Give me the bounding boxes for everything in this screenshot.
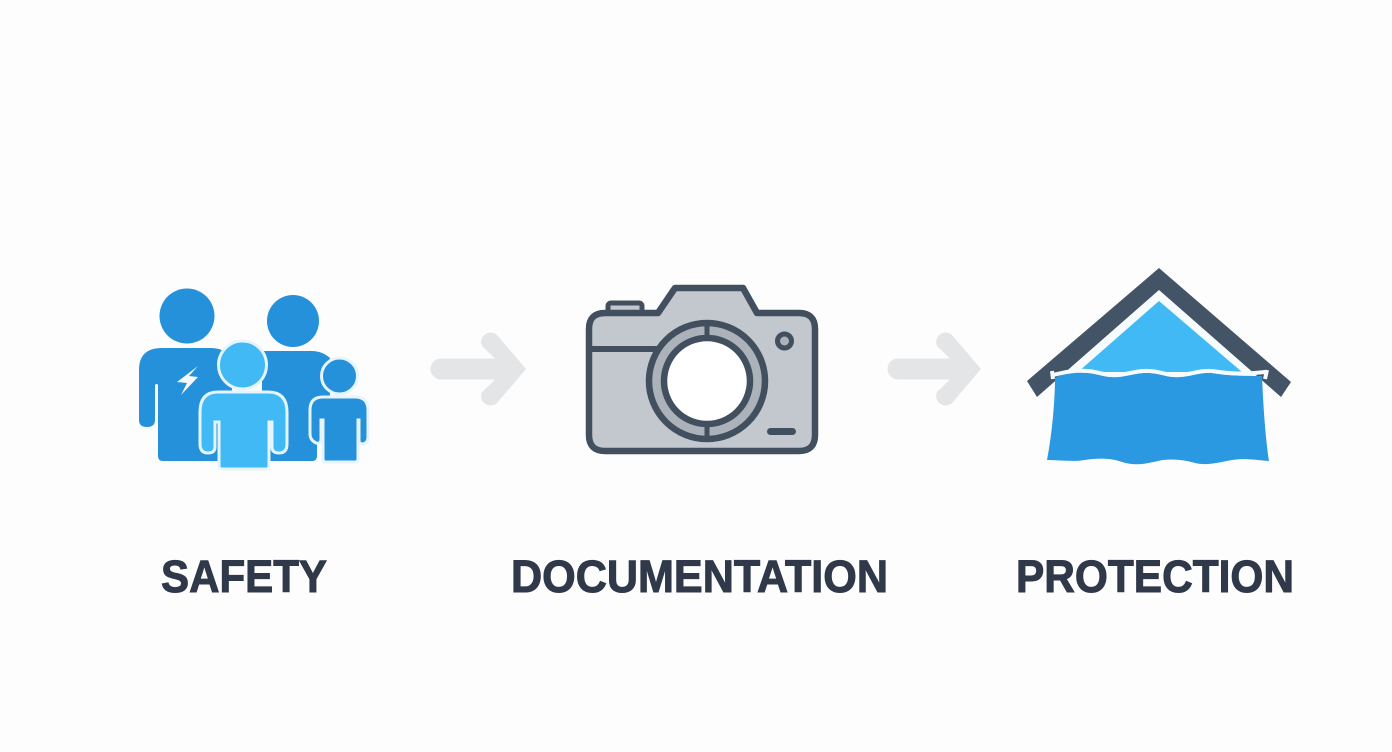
icon: flood water — [1047, 373, 1269, 464]
icon: camera slot — [767, 428, 796, 435]
icon: roof — [1027, 268, 1291, 397]
label: safety: SAFETY — [161, 551, 327, 602]
icon: viewfinder bump — [608, 303, 642, 317]
label: documentation: DOCUMENTATION — [511, 551, 888, 602]
arrow: safety to documentation — [430, 333, 526, 405]
panel: camera icon — [589, 288, 815, 451]
panel: safety icon — [139, 288, 368, 469]
icon: centre child — [200, 341, 287, 469]
icon: attic triangle — [1078, 301, 1242, 372]
icon: camera button — [778, 334, 792, 348]
icon: left adult — [139, 288, 232, 461]
icon: right adult — [262, 295, 330, 461]
panel: protection icon — [1027, 268, 1291, 464]
icon: camera body — [589, 288, 815, 451]
label: protection: PROTECTION — [1016, 551, 1294, 602]
icon: waterline — [1052, 370, 1267, 379]
icon: small child — [310, 358, 368, 462]
icon: camera lens — [649, 323, 765, 439]
icon: attic white edge — [1071, 291, 1248, 369]
decorative band line — [590, 346, 663, 352]
arrow: documentation to protection — [888, 333, 981, 405]
icon: lightning bolt — [177, 366, 198, 395]
